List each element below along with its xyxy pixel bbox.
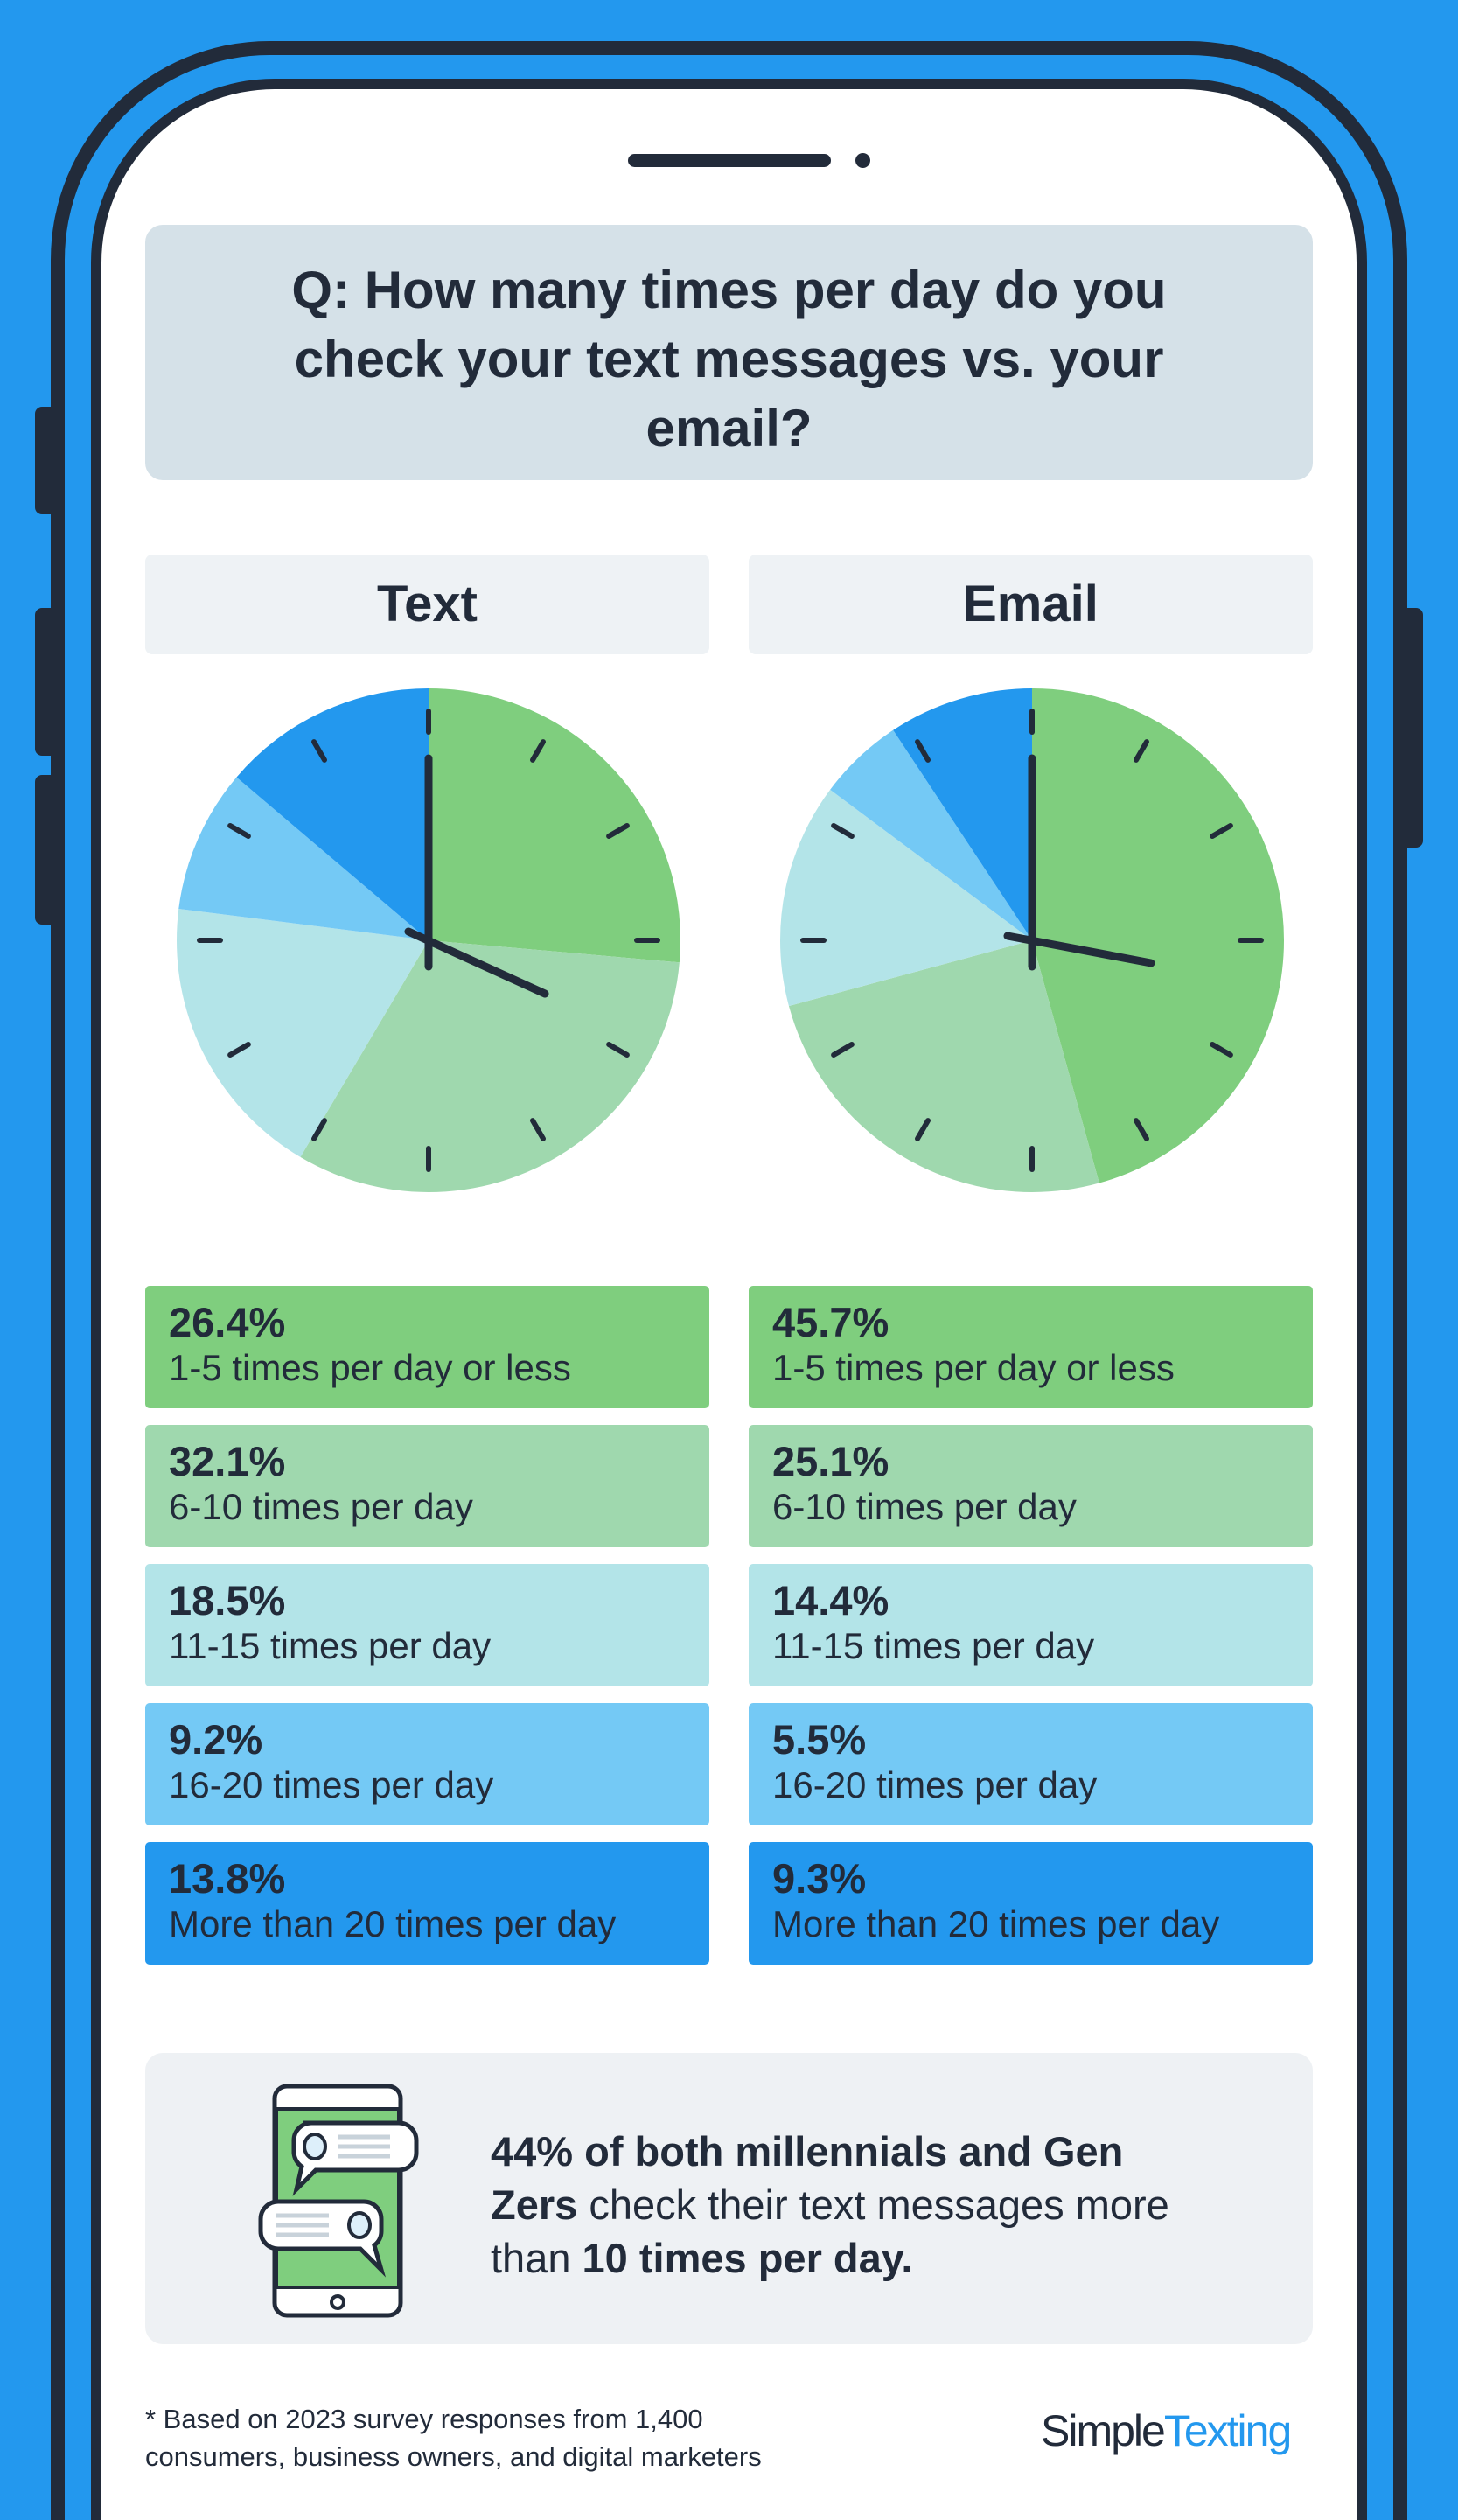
callout text: Zers check their text messages more	[491, 2181, 1169, 2228]
legend: Email: 9.3%	[772, 1855, 866, 1902]
legend: Text: 13.8%	[169, 1855, 285, 1902]
legend: Text: 26.4%	[169, 1299, 285, 1345]
callout text	[491, 2128, 1169, 2281]
legend: Email	[749, 1286, 1313, 1965]
legend: Email: 1-5 times per day or less	[772, 1347, 1175, 1388]
clock chart: Email	[780, 688, 1284, 1192]
callout text: than 10 times per day.	[491, 2235, 912, 2281]
legend: Email: 11-15 times per day	[772, 1625, 1094, 1666]
legend: Text: 18.5%	[169, 1577, 285, 1623]
side buttons	[35, 407, 1423, 925]
legend: Text: 1-5 times per day or less	[169, 1347, 571, 1388]
clock chart: Text	[177, 688, 680, 1192]
heading: Email	[749, 555, 1313, 654]
legend: Text	[145, 1286, 709, 1965]
notch: speaker and camera	[628, 153, 870, 168]
legend: Email: 5.5%	[772, 1716, 866, 1763]
legend: Text: 9.2%	[169, 1716, 262, 1763]
heading: Text: Text	[377, 576, 478, 632]
heading: Email: Email	[963, 576, 1099, 632]
logo: SimpleTexting: SimpleTexting	[1041, 2406, 1290, 2455]
legend: Email: More than 20 times per day	[772, 1903, 1219, 1944]
legend: Email: 14.4%	[772, 1577, 889, 1623]
legend: Text: 6-10 times per day	[169, 1486, 473, 1527]
title: question	[145, 225, 1313, 480]
legend: Text: More than 20 times per day	[169, 1903, 616, 1944]
legend: Email: 16-20 times per day	[772, 1764, 1097, 1805]
legend: Text: 32.1%	[169, 1438, 285, 1484]
legend: Text: 11-15 times per day	[169, 1625, 491, 1666]
heading: Text	[145, 555, 709, 654]
title: question: Q: How many times per day do you check your text messages vs. your email?	[291, 261, 1167, 457]
panel: callout	[145, 2053, 1313, 2344]
icon: phone with chat bubbles	[259, 2084, 418, 2318]
legend: Email: 25.1%	[772, 1438, 889, 1484]
footnote: * Based on 2023 survey responses from 1,400	[145, 2404, 703, 2434]
footnote: consumers, business owners, and digital marketers	[145, 2441, 762, 2472]
legend: Text: 16-20 times per day	[169, 1764, 493, 1805]
legend: Email: 45.7%	[772, 1299, 889, 1345]
footnote	[145, 2404, 762, 2472]
legend: Email: 6-10 times per day	[772, 1486, 1077, 1527]
callout text: 44% of both millennials and Gen	[491, 2128, 1123, 2174]
